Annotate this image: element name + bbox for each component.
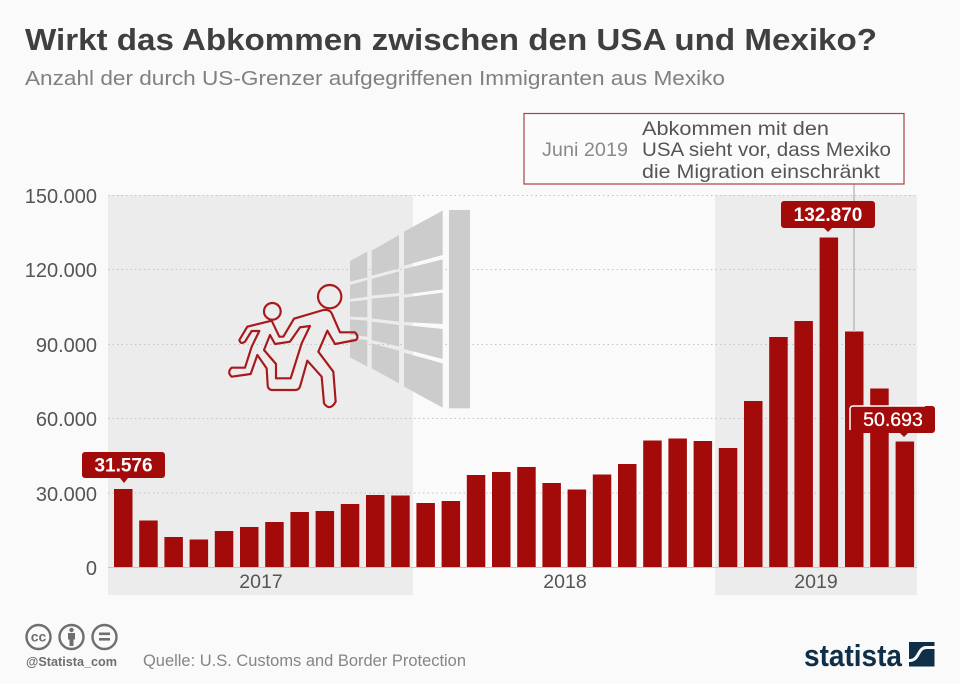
subtitle: Anzahl der durch US-Grenzer aufgegriffenen Immigranten aus Mexiko [25,67,725,90]
x axis year labels [239,571,838,593]
y axis labels [25,186,97,580]
y axis labels: 90.000 [36,335,97,357]
source: Quelle: U.S. Customs and Border Protection [143,652,466,670]
y axis labels: 150.000 [25,186,97,208]
bar chart [114,238,914,567]
icon: running figures [229,285,357,407]
value label: 31.576: 31.576 [94,456,153,476]
value label: 132.870 [781,201,875,232]
callout: Juni 2019 agreement: USA sieht vor, dass Mexiko [642,139,891,161]
callout: Juni 2019 agreement [524,114,904,184]
x axis year labels: 2019 [794,571,838,593]
value label: 31.576 [82,452,165,483]
y axis labels: 120.000 [25,260,97,282]
icon: creative commons [26,625,116,649]
title: Wirkt das Abkommen zwischen den USA und Mexiko? [25,22,877,57]
period band: 2019 [715,195,917,595]
x axis year labels: 2017 [239,571,283,593]
period band: 2017 [108,195,413,595]
social handle: @Statista_com [26,655,117,669]
icon: creative commons: cc [31,628,46,644]
callout: Juni 2019 agreement: Abkommen mit den [642,118,829,140]
y axis labels: 60.000 [36,409,97,431]
value label: 50.693 [850,406,935,437]
callout: Juni 2019 agreement: die Migration einschränkt [642,161,881,183]
y axis labels: 0 [86,558,97,580]
callout: Juni 2019 agreement: Juni 2019 [542,140,628,161]
annotation leader line [853,184,855,332]
value label: 50.693: 50.693 [863,409,923,431]
statista logo: statista [804,638,903,673]
x axis year labels: 2018 [543,571,587,593]
y axis labels: 30.000 [36,484,97,506]
icon: border wall [350,210,470,408]
value label: 132.870: 132.870 [794,205,862,226]
